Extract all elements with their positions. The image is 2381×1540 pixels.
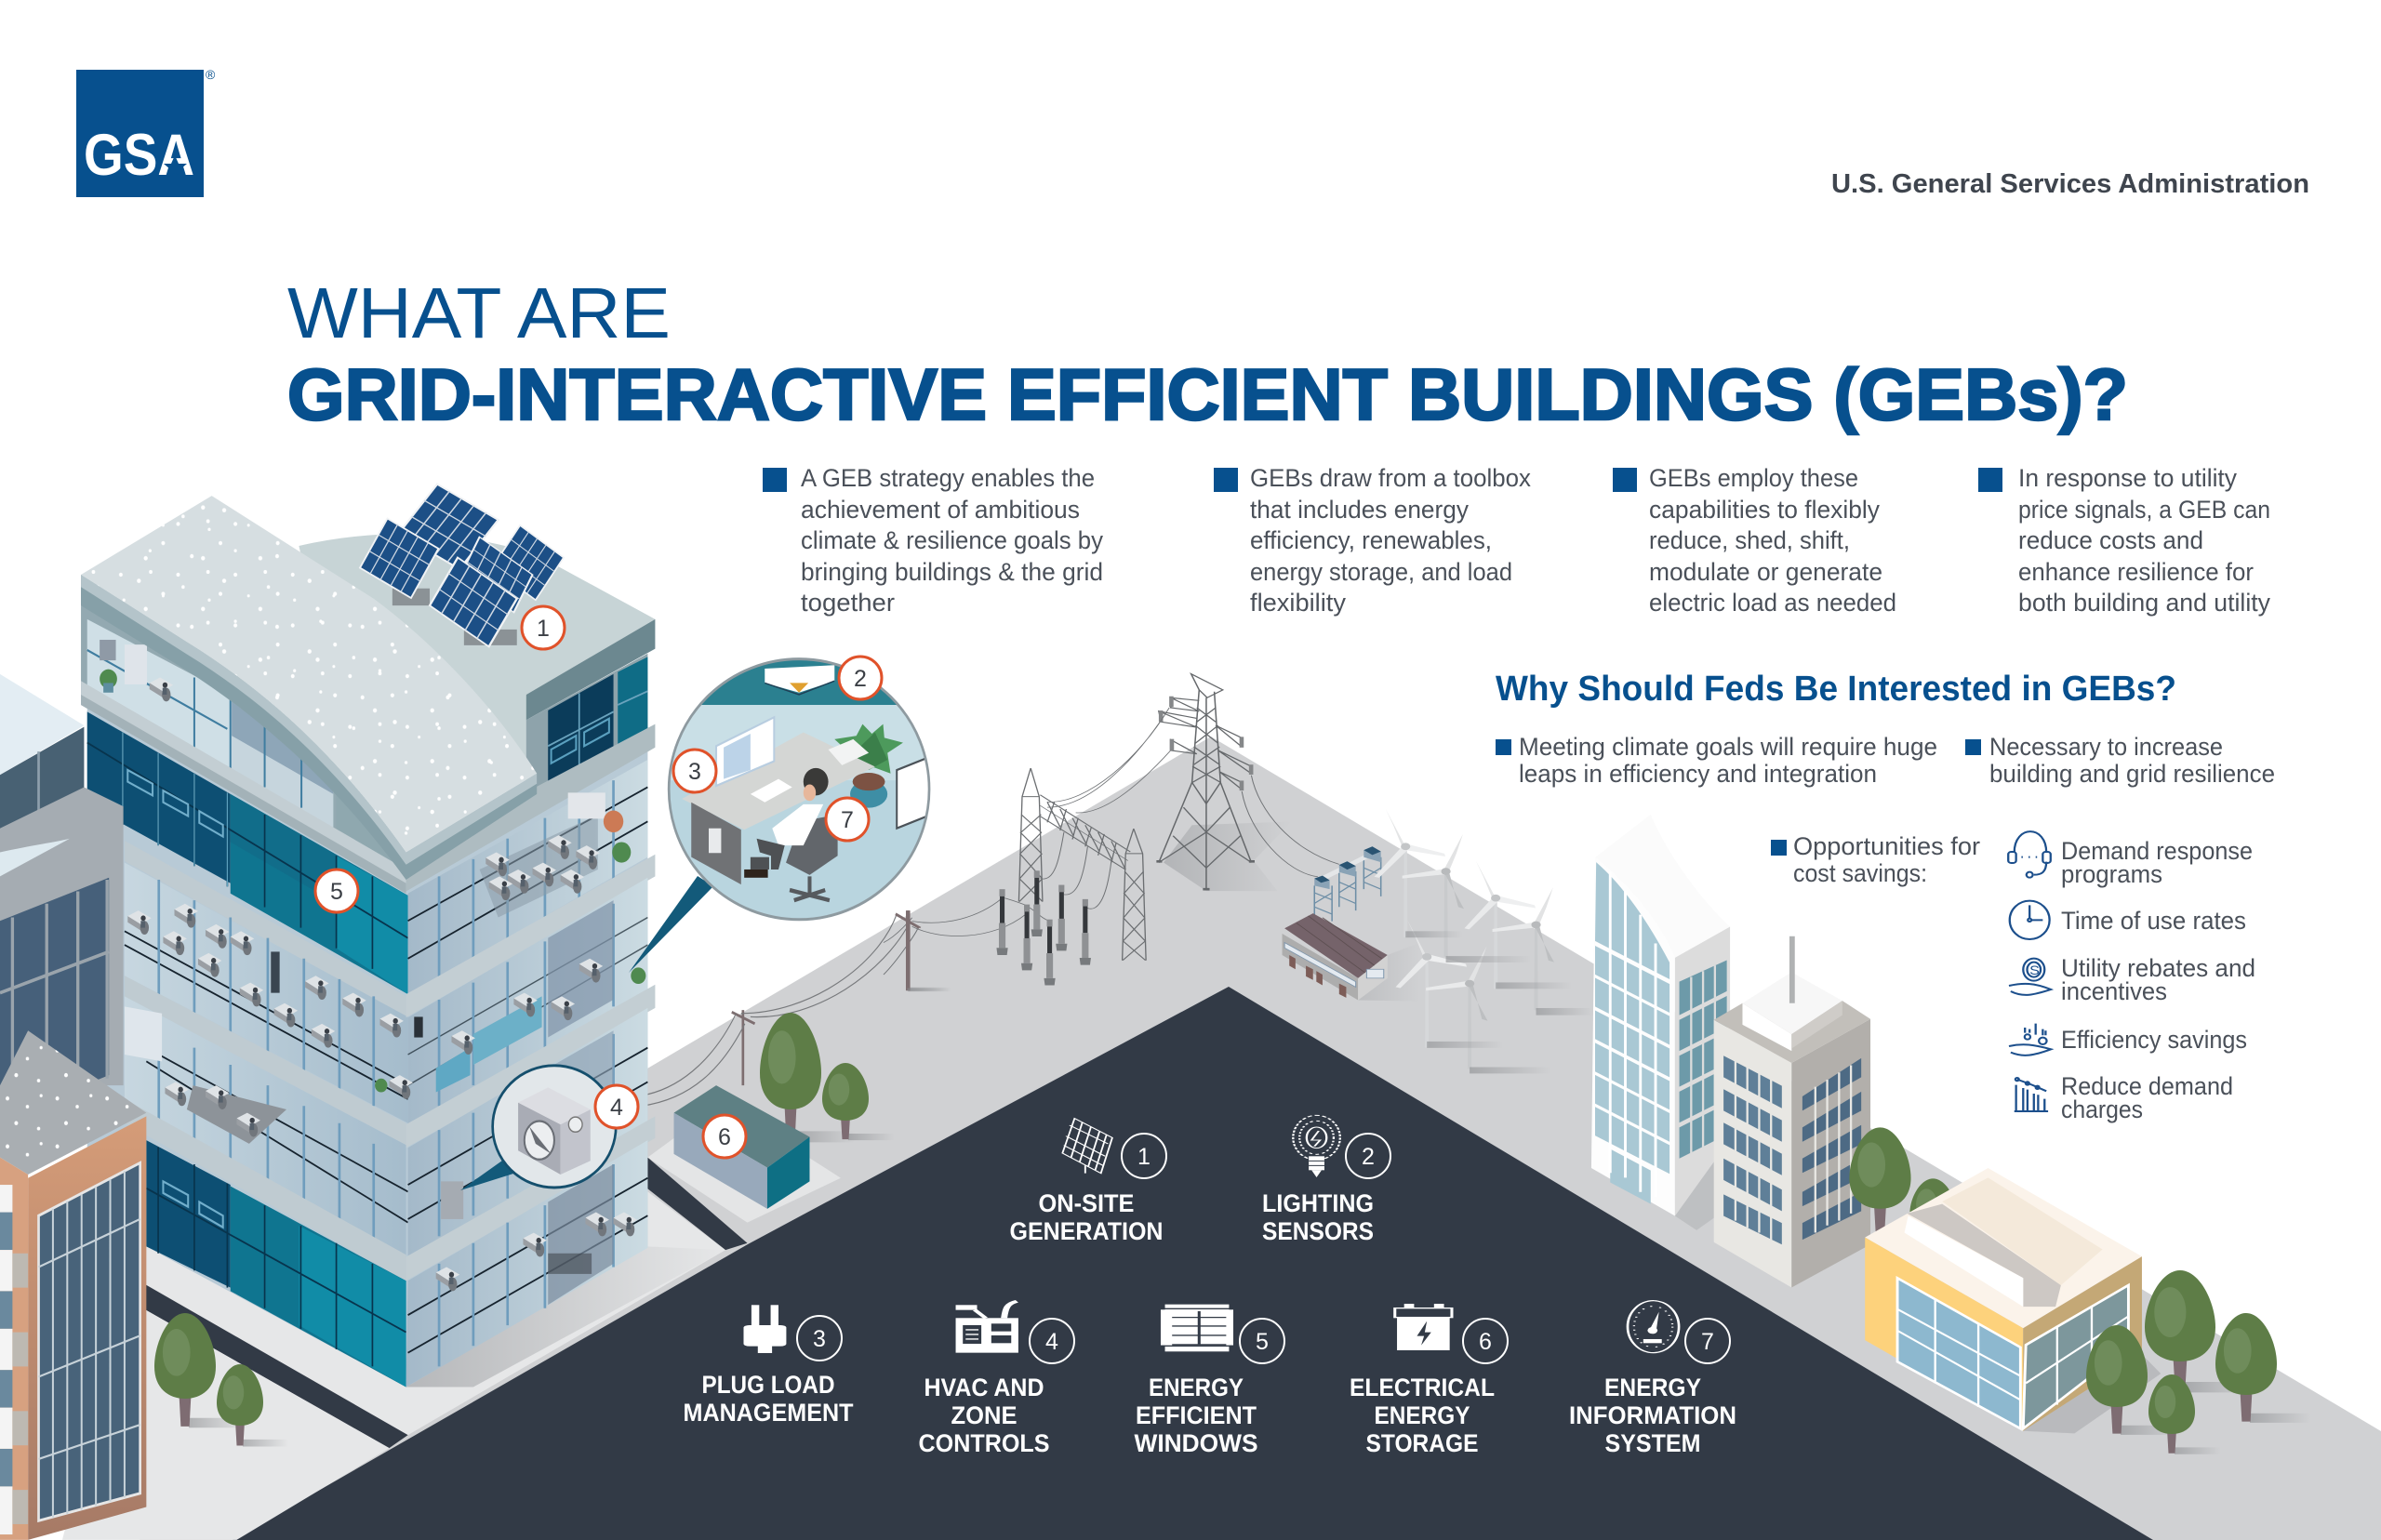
dark side street — [617, 1158, 748, 1250]
roof speck overlay — [81, 496, 537, 853]
bullet: climate goals: Meeting climate goals will require huge — [1519, 733, 1937, 761]
number labels in dark panel: 5 — [1256, 1329, 1269, 1355]
right slab 2 — [406, 855, 655, 1017]
bullet: resilience: building and grid resilience — [1989, 760, 2275, 788]
utility pole — [896, 910, 950, 991]
badge numbers: 6 — [718, 1124, 731, 1150]
label: HVAC: ZONE — [951, 1401, 1018, 1429]
icon: savings hand — [2009, 1024, 2051, 1055]
main building sidewalk — [125, 1191, 725, 1435]
pole wires — [642, 914, 911, 1106]
label: storage: ENERGY — [1375, 1401, 1470, 1429]
solar panels on roof — [360, 485, 564, 646]
label: information system: SYSTEM — [1605, 1429, 1700, 1457]
rear roof rim — [526, 619, 655, 720]
gantry frame — [1018, 768, 1146, 961]
callout: HVAC unit circle — [493, 1066, 616, 1188]
dark panel labels — [683, 1189, 1736, 1457]
slab left 3 — [125, 976, 406, 1145]
left side buildings — [0, 674, 146, 1540]
icon: light sensor bulb — [1293, 1115, 1340, 1177]
pole 2 — [896, 910, 919, 989]
label: plug load — [683, 1371, 854, 1427]
slab shade — [81, 695, 406, 894]
column 2: that includes energy — [1250, 496, 1469, 524]
column 4 — [1978, 464, 2270, 617]
column 4: both building and utility — [2018, 589, 2270, 617]
sidewalks around main building — [62, 1103, 841, 1540]
label: windows: WINDOWS — [1135, 1429, 1257, 1457]
right upper wall — [526, 654, 647, 801]
office tower — [1714, 936, 1870, 1288]
right upper dark windows — [548, 657, 647, 787]
column 4: price signals, a GEB can — [2018, 496, 2270, 524]
bullet: resilience — [1965, 733, 2275, 788]
insulators on pylon — [1159, 697, 1253, 790]
icon: solar panel — [1062, 1119, 1112, 1174]
callout pointer to office — [629, 876, 713, 973]
badge numbers: 3 — [688, 759, 701, 785]
right glass floor 3 — [408, 1008, 647, 1256]
white cabinet — [897, 756, 931, 829]
column 1 — [763, 464, 1103, 617]
teal curtain wall bottom — [146, 1140, 406, 1387]
label: plug load: MANAGEMENT — [683, 1399, 854, 1427]
label: lighting sensors: LIGHTING — [1262, 1189, 1374, 1217]
section heading: Why Should Feds Be Interested in GEBs? — [1496, 670, 2176, 709]
label: windows: ENERGY — [1149, 1374, 1244, 1401]
title — [287, 273, 2128, 435]
slab left 4 — [125, 1099, 406, 1281]
glass floor left 2 — [125, 863, 408, 1123]
column 1: achievement of ambitious — [801, 496, 1080, 524]
battery storage unit — [674, 1085, 809, 1209]
label: information system — [1569, 1374, 1736, 1457]
column 1: together — [801, 589, 895, 617]
glass tower — [1591, 815, 1730, 1215]
agency name: U.S. General Services Administration — [1831, 169, 2309, 199]
label: information system: INFORMATION — [1569, 1401, 1736, 1429]
trees right group — [2086, 1270, 2310, 1454]
bullet: resilience: Necessary to increase — [1989, 733, 2223, 761]
right slab 3 — [406, 985, 655, 1148]
dark panel icons — [743, 1115, 1679, 1353]
label: windows — [1135, 1374, 1257, 1457]
bullet: cost savings — [1771, 832, 1980, 887]
right slab 4 — [406, 1116, 655, 1281]
savings list: Efficiency savings — [2061, 1026, 2247, 1054]
road stripe by main building — [125, 1272, 408, 1448]
column 2: GEBs draw from a toolbox — [1250, 464, 1531, 492]
label: storage — [1350, 1374, 1495, 1457]
brick building — [0, 1030, 146, 1540]
back wall — [666, 705, 934, 780]
column 1: A GEB strategy enables the — [801, 464, 1095, 492]
desk papers — [829, 739, 869, 765]
savings list — [2061, 837, 2255, 1123]
label: lighting sensors: SENSORS — [1262, 1217, 1374, 1245]
badge numbers: 2 — [854, 666, 867, 692]
label: on-site generation: GENERATION — [1010, 1217, 1163, 1245]
transmission yard — [884, 674, 1593, 1073]
number labels in dark panel: 7 — [1701, 1329, 1714, 1355]
factory shadow — [1358, 943, 1420, 1002]
column 2: efficiency, renewables, — [1250, 526, 1492, 554]
upper floor darker panels — [87, 640, 333, 831]
badge numbers: 1 — [537, 616, 550, 642]
title: WHAT ARE — [287, 273, 671, 353]
column 4: In response to utility — [2018, 464, 2237, 492]
building ground shadow — [406, 1246, 725, 1387]
monitor — [716, 717, 774, 786]
bullet: cost savings: cost savings: — [1793, 859, 1927, 887]
trees left group — [154, 1013, 895, 1446]
wind turbines — [1375, 809, 1593, 1073]
label: HVAC: HVAC AND — [924, 1374, 1044, 1401]
savings list: Time of use rates — [2061, 907, 2246, 935]
label: lighting sensors — [1262, 1189, 1374, 1245]
main building — [81, 496, 655, 1387]
badge numbers — [330, 616, 867, 1150]
column 3: GEBs employ these — [1649, 464, 1858, 492]
panel mounts — [392, 589, 430, 605]
column 3: capabilities to flexibly — [1649, 496, 1880, 524]
icon: coin hand — [2009, 959, 2051, 995]
column 3: reduce, shed, shift, — [1649, 526, 1850, 554]
icon: plug — [743, 1305, 786, 1353]
label: storage: STORAGE — [1365, 1429, 1479, 1457]
icon: headset — [2008, 831, 2051, 878]
chair — [786, 815, 838, 875]
numbered badges on illustration — [315, 606, 882, 1158]
number labels in dark panel: 4 — [1045, 1329, 1058, 1355]
rear roof — [299, 534, 655, 774]
GSA logo: GSA — [84, 123, 194, 188]
ceiling light — [765, 665, 834, 695]
dark central road — [233, 987, 2153, 1540]
roof rim light band — [81, 575, 537, 865]
desk side — [691, 803, 741, 884]
right glass floor 1 — [408, 760, 647, 994]
column 2 — [1214, 464, 1531, 617]
label: on-site generation: ON-SITE — [1038, 1189, 1135, 1217]
person — [744, 768, 829, 878]
icon: battery — [1395, 1304, 1452, 1350]
number labels in dark panel — [813, 1144, 1714, 1355]
pole 1 — [732, 1010, 755, 1085]
bullet: cost savings: Opportunities for — [1793, 832, 1980, 860]
icon: HVAC unit — [956, 1301, 1018, 1353]
glass floor left 3 — [125, 996, 408, 1256]
main curved roof — [81, 496, 537, 853]
HVAC unit — [518, 1103, 561, 1175]
label: on-site generation — [1010, 1189, 1163, 1245]
savings list: Reduce demand — [2061, 1072, 2233, 1100]
power outlet — [709, 829, 721, 853]
savings icons — [2008, 831, 2051, 1111]
right glass floor 2 — [375, 878, 647, 1124]
grey tower — [0, 787, 124, 1120]
roof rim shadow band — [81, 575, 537, 880]
floor slab left 1 — [81, 681, 406, 894]
power lines and utility poles near building — [642, 910, 951, 1106]
conductor wires — [884, 708, 1339, 975]
generation plant building — [1283, 913, 1388, 1001]
column 4: enhance resilience for — [2018, 558, 2254, 586]
GSA logo: ® — [206, 67, 216, 82]
badge numbers: 4 — [610, 1095, 623, 1121]
column 1: climate & resilience goals by — [801, 526, 1103, 554]
panel array — [360, 485, 564, 646]
column 2: energy storage, and load — [1250, 558, 1512, 586]
number labels in dark panel: 6 — [1479, 1329, 1492, 1355]
number labels in dark panel: 2 — [1362, 1144, 1375, 1170]
title: GRID-INTERACTIVE EFFICIENT BUILDINGS (GEBs)? — [287, 353, 2128, 435]
upper floor left glass — [87, 619, 333, 831]
teal ceiling — [701, 660, 897, 705]
badge numbers: 5 — [330, 879, 343, 905]
icon: window — [1161, 1305, 1233, 1351]
number circles in dark panel — [797, 1134, 1730, 1363]
column 3: modulate or generate — [1649, 558, 1882, 586]
icon: energy gauge — [1628, 1301, 1679, 1353]
teal curtain wall top — [87, 711, 408, 994]
column 4: reduce costs and — [2018, 526, 2203, 554]
main pylon — [1156, 674, 1255, 889]
insulators yard — [996, 870, 1091, 985]
callout pointer to HVAC — [460, 1161, 513, 1190]
trees behind low building — [1849, 1127, 1982, 1253]
battery pad — [647, 1103, 841, 1223]
lower sidewalk — [62, 1298, 390, 1540]
right slab 1 — [406, 724, 655, 892]
building core — [87, 602, 647, 1387]
label: HVAC — [919, 1374, 1049, 1457]
savings list: charges — [2061, 1095, 2143, 1123]
right side buildings — [1591, 815, 2161, 1433]
icon: clock — [2010, 901, 2050, 939]
label: storage: ELECTRICAL — [1350, 1374, 1495, 1401]
badge numbers: 7 — [841, 807, 854, 833]
glass tower shadow — [1675, 1139, 1777, 1230]
right glass floor 4 — [406, 1140, 647, 1387]
ground: grey city block — [140, 737, 2381, 1540]
column 3 — [1613, 464, 1896, 617]
number labels in dark panel: 1 — [1137, 1144, 1151, 1170]
savings list: incentives — [2061, 977, 2167, 1005]
icon: bar chart — [2015, 1078, 2048, 1111]
pole shadow — [908, 988, 951, 991]
label: plug load: PLUG LOAD — [701, 1371, 835, 1399]
wall under curved roof — [81, 575, 406, 892]
label: windows: EFFICIENT — [1136, 1401, 1257, 1429]
column 2: flexibility — [1250, 589, 1347, 617]
plant — [834, 724, 903, 808]
desk top — [682, 733, 875, 830]
substation towers — [1314, 846, 1381, 922]
low yellow building — [1865, 1168, 2161, 1433]
slab left 2 — [125, 841, 406, 1016]
bullet: climate goals: leaps in efficiency and integration — [1519, 760, 1877, 788]
callout: office detail circle — [666, 657, 934, 920]
keyboard — [751, 779, 792, 803]
GSA logo — [76, 67, 216, 197]
label: information system: ENERGY — [1604, 1374, 1701, 1401]
label: HVAC: CONTROLS — [919, 1429, 1049, 1457]
icon: coin hand: S — [2029, 963, 2040, 978]
savings list: Utility rebates and — [2061, 954, 2255, 982]
number labels in dark panel: 3 — [813, 1326, 826, 1352]
column 3: electric load as needed — [1649, 589, 1896, 617]
savings list: Demand response — [2061, 837, 2253, 865]
savings list: programs — [2061, 860, 2162, 888]
pale tower — [0, 674, 84, 839]
pylon shadow — [1164, 821, 1292, 891]
column 1: bringing buildings & the grid — [801, 558, 1103, 586]
curved wall under roof — [293, 725, 406, 876]
bullet: climate goals — [1496, 733, 1937, 788]
